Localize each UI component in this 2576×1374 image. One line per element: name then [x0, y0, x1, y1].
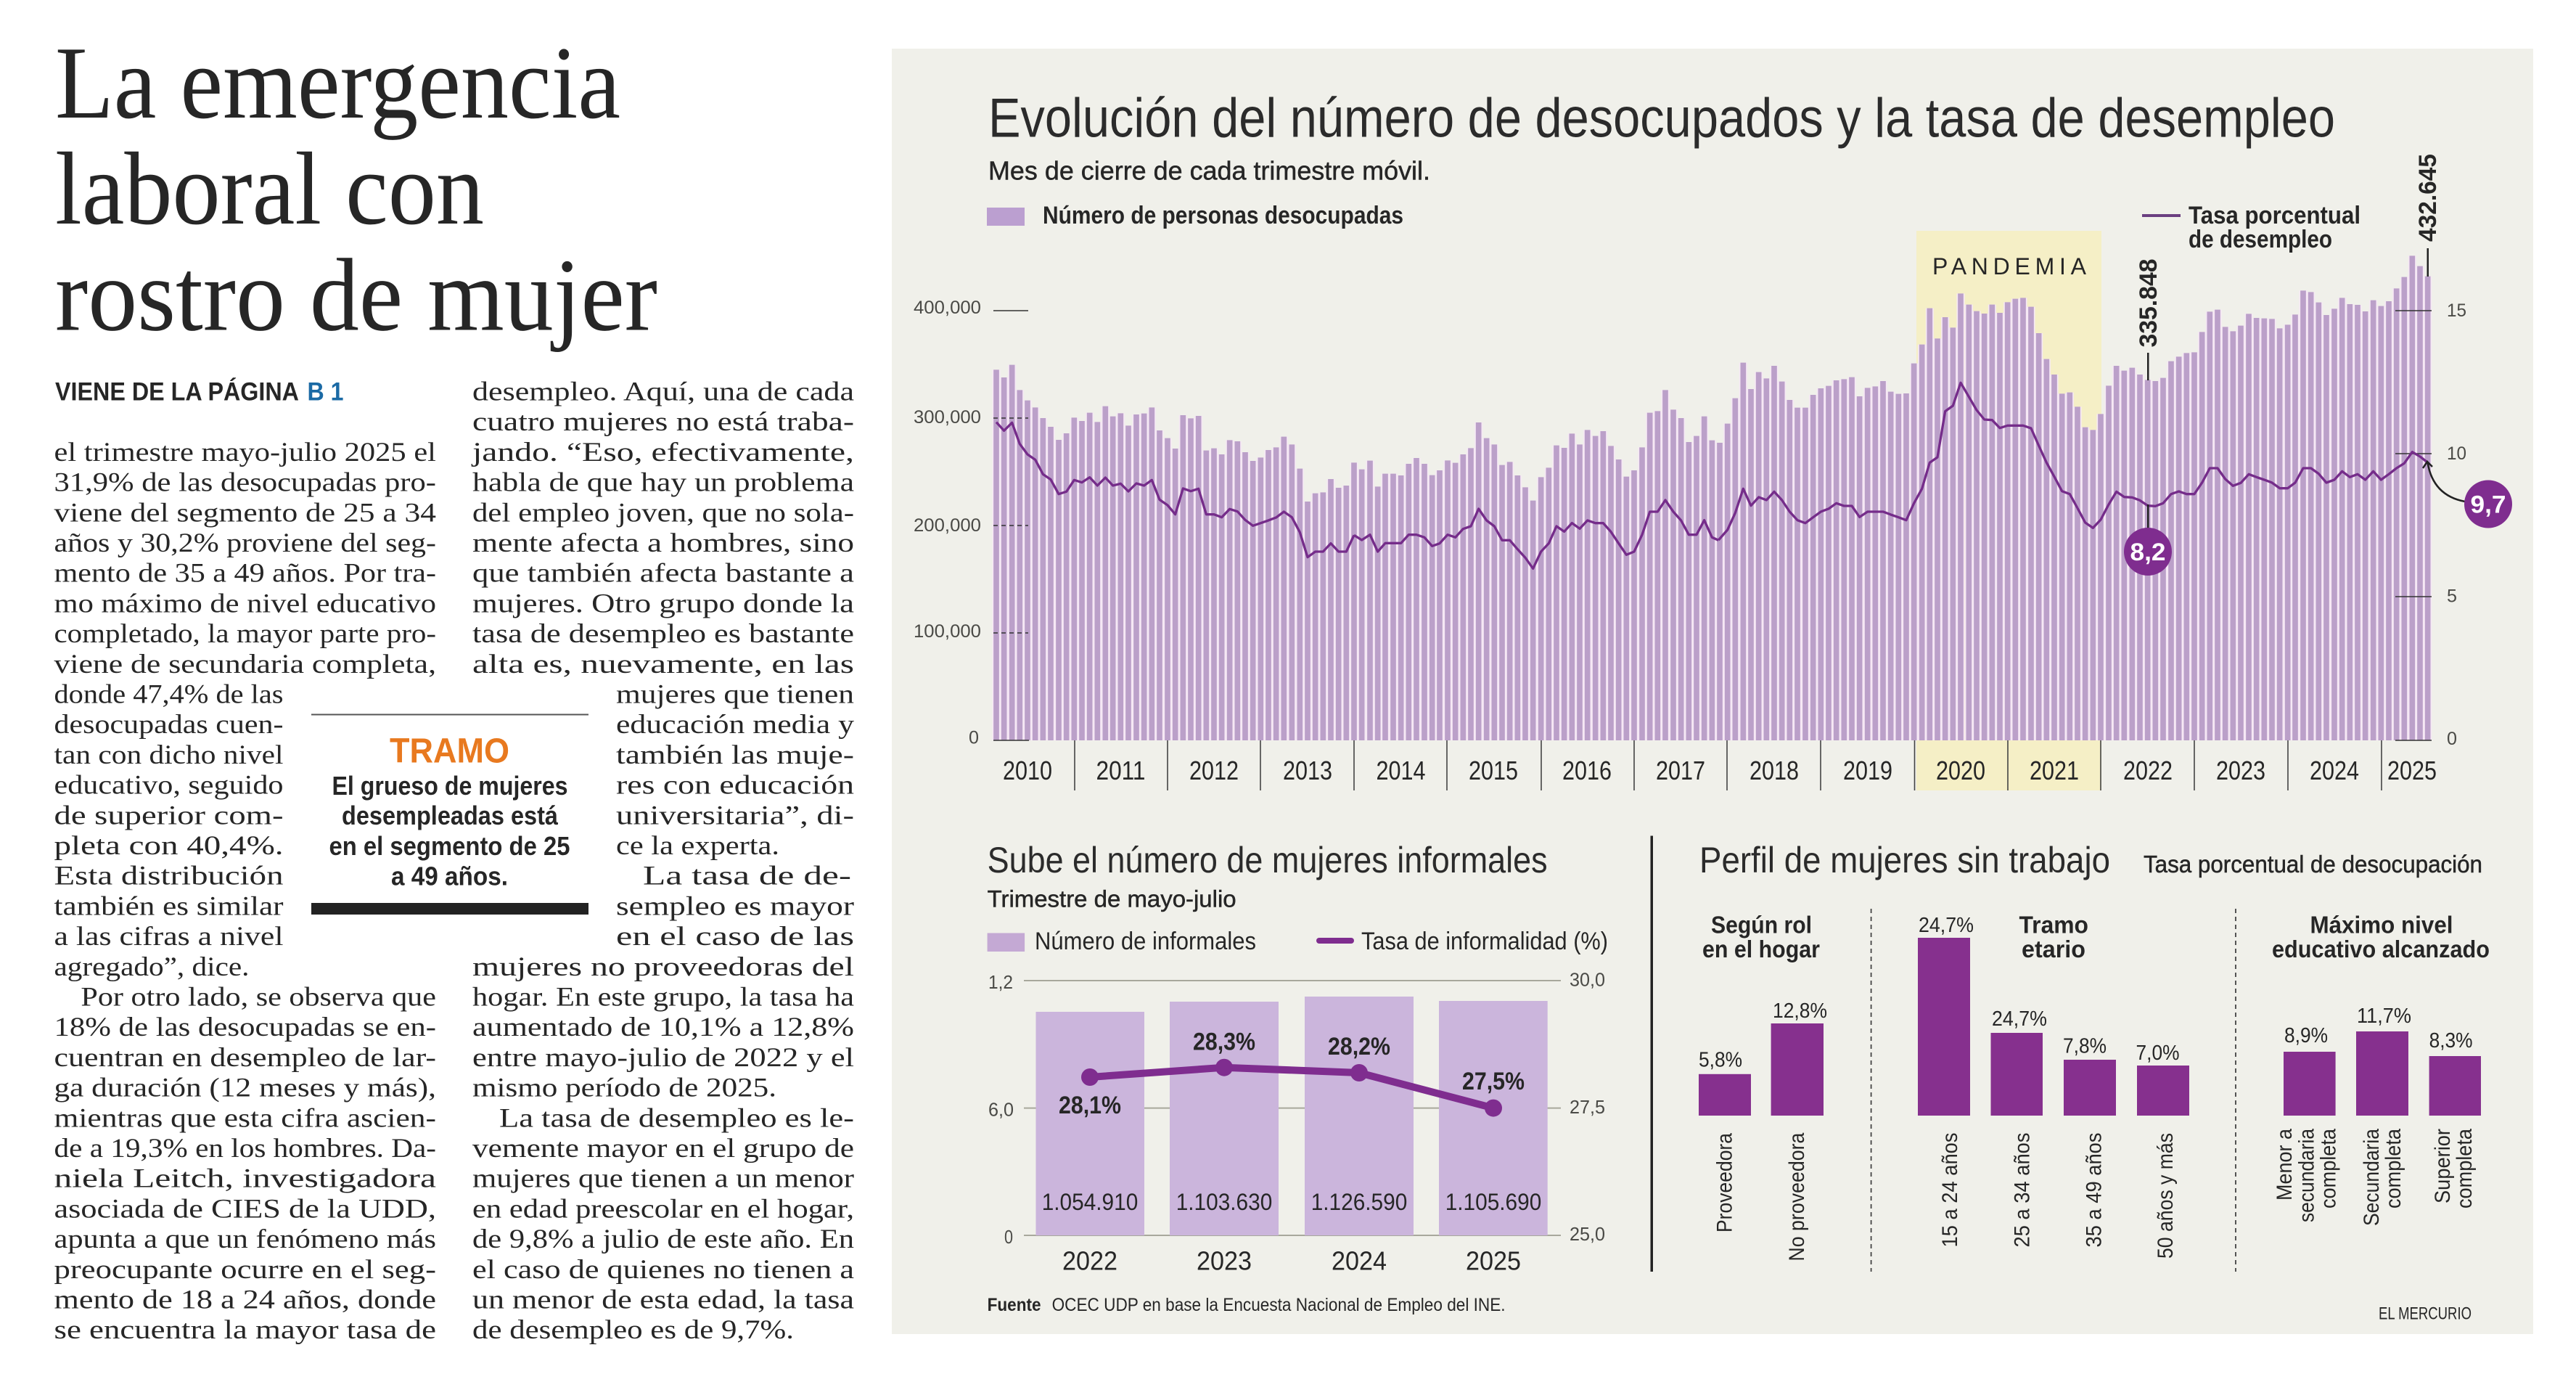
year axis labels: 2013: [1283, 756, 1332, 785]
axis ticks: [993, 311, 2432, 790]
legend: número de informales: Número de informales: [1035, 928, 1256, 955]
article text: second column: habla de que hay un problema: [472, 468, 854, 498]
bar group: tramo etario: 7,0%: [2136, 1042, 2180, 1065]
bar group: máximo nivel educativo alcanzado: 8,3%: [2429, 1029, 2473, 1052]
axis labels: 1,2: [988, 971, 1013, 993]
article text: first column: niela Leitch, investigadora: [54, 1164, 436, 1194]
article text: second column: un menor de esta edad, la tasa: [472, 1285, 854, 1315]
rate labels: 28,3%: [1193, 1029, 1255, 1056]
bar group: máximo nivel educativo alcanzado: completa: [2453, 1129, 2477, 1209]
bar group: máximo nivel educativo alcanzado: Menor a: [2273, 1129, 2297, 1201]
bar group: máximo nivel educativo alcanzado: 8,9%: [2284, 1024, 2328, 1047]
article text: second column: jando. “Eso, efectivamente,: [470, 438, 854, 467]
article text: second column: sempleo es mayor: [616, 891, 854, 921]
article text: second column: en el caso de las: [616, 922, 854, 952]
year axis labels: 2018: [1750, 756, 1799, 785]
right axis labels: 0: [2447, 729, 2457, 749]
legend: tasa porcentual de desempleo: de desempleo: [2189, 226, 2332, 253]
heading: perfil de mujeres sin trabajo: Perfil de mujeres sin trabajo: [1699, 840, 2110, 880]
article text: second column: del empleo joven, que no sola-: [472, 498, 854, 528]
bar group: según rol en el hogar: 5,8%: [1699, 1049, 1742, 1072]
article text: second column: mujeres. Otro grupo donde la: [472, 589, 854, 618]
callout: 432.645: 432.645: [2414, 154, 2442, 242]
article text: first column: de superior com-: [54, 801, 283, 830]
article text: second column: mismo período de 2025.: [472, 1074, 776, 1103]
article text: first column: también es similar: [54, 891, 283, 921]
article text: second column: entre mayo-julio de 2022 y el: [472, 1043, 854, 1073]
pandemic highlight band: PANDEMIA: [1932, 253, 2087, 279]
right axis labels: [2447, 300, 2466, 749]
axis labels: 6,0: [988, 1099, 1014, 1121]
article text: second column: el caso de quienes no tienen a: [472, 1255, 854, 1285]
article text: first column: años y 30,2% proviene del seg-: [54, 528, 436, 558]
article text: first column: mientras que esta cifra ascien-: [54, 1103, 436, 1133]
callout: 335.848: 335.848: [2135, 258, 2162, 347]
article text: first column: tan con dicho nivel: [54, 740, 283, 770]
bar group: máximo nivel educativo alcanzado: completa: [2317, 1129, 2341, 1209]
pull quote: tramo: desempleadas está: [342, 801, 559, 830]
headline: rostro de mujer: [55, 238, 657, 353]
right axis labels: 10: [2447, 443, 2466, 464]
bars: número de informales: [1036, 997, 1548, 1235]
pandemic highlight band: [1916, 231, 2101, 790]
year axis labels: 2021: [2030, 756, 2079, 785]
bar group: tramo etario: 35 a 49 años: [2082, 1132, 2106, 1247]
article text: first column: a las cifras a nivel: [54, 922, 283, 952]
axis labels: [988, 969, 1605, 1248]
subheading: tasa porcentual de desocupación: Tasa porcentual de desocupación: [2144, 851, 2482, 878]
year axis labels: 2023: [2216, 756, 2265, 785]
subheading: trimestre de mayo-julio: Trimestre de mayo-julio: [988, 886, 1236, 912]
bar group: máximo nivel educativo alcanzado: completa: [2382, 1129, 2405, 1209]
bar group: máximo nivel educativo alcanzado: secundaria: [2294, 1129, 2318, 1222]
subheading: mes de cierre: Mes de cierre de cada trimestre móvil.: [988, 155, 1430, 186]
bar group: máximo nivel educativo alcanzado: Secundaria: [2360, 1129, 2384, 1226]
right axis labels: 5: [2447, 586, 2457, 607]
article text: second column: que también afecta bastante a: [472, 559, 854, 589]
article text: first column: asociada de CIES de la UDD,: [54, 1194, 436, 1224]
article text: second column: res con educación: [616, 771, 854, 801]
article text: first column: mo máximo de nivel educativo: [54, 589, 436, 618]
source note: OCEC UDP en base la Encuesta Nacional de Empleo del INE.: [1052, 1295, 1506, 1315]
bar group: tramo etario: 24,7%: [1919, 914, 1974, 937]
article text: first column: agregado”, dice.: [54, 952, 250, 982]
headline: [55, 25, 657, 353]
article text: second column: La tasa de desempleo es le-: [499, 1103, 854, 1133]
pull quote: tramo: TRAMO: [390, 732, 509, 771]
article text: second column: La tasa de de-: [643, 862, 851, 891]
source note: Fuente: [988, 1295, 1041, 1315]
left axis labels: 200,000: [914, 515, 981, 536]
credit: el mercurio: EL MERCURIO: [2379, 1304, 2472, 1324]
year axis labels: 2011: [1096, 756, 1145, 785]
axis labels: 0: [1004, 1226, 1013, 1248]
line: tasa de informalidad: [1081, 1059, 1502, 1117]
bar chart: personas desocupadas: [996, 255, 2428, 740]
left axis labels: 0: [969, 727, 979, 748]
bar group: máximo nivel educativo alcanzado: 11,7%: [2357, 1005, 2411, 1028]
chart: mujeres informales: [988, 969, 1605, 1276]
year axis labels: 2016: [1562, 756, 1612, 785]
article text: first column: preocupante ocurre en el seg-: [54, 1255, 436, 1285]
article text: first column: desocupadas cuen-: [54, 710, 283, 740]
axis labels: 27,5: [1570, 1096, 1605, 1118]
article text: second column: de 9,8% a julio de este año. En: [472, 1224, 854, 1254]
article text: first column: viene del segmento de 25 a 34: [54, 498, 436, 528]
bar value labels: 1.103.630: [1176, 1189, 1272, 1215]
heading: sube el número de mujeres informales: Sube el número de mujeres informales: [988, 840, 1548, 880]
bar group: según rol en el hogar: No proveedora: [1785, 1132, 1809, 1261]
article text: first column: educativo, seguido: [54, 771, 283, 801]
article text: second column: mujeres que tienen a un menor: [472, 1164, 854, 1194]
year axis labels: 2017: [1656, 756, 1705, 785]
article text: first column: el trimestre mayo-julio 2025 el: [54, 438, 436, 467]
pull quote: tramo: El grueso de mujeres: [332, 771, 567, 801]
article text: first column: ga duración (12 meses y más),: [54, 1074, 436, 1103]
bar group: según rol en el hogar: [1699, 912, 1827, 1261]
article text: first column: mento de 35 a 49 años. Por tra-: [54, 559, 436, 589]
bar group: tramo etario: 7,8%: [2063, 1035, 2107, 1058]
bar group: tramo etario: Tramo: [2019, 912, 2088, 938]
left axis labels: 400,000: [914, 298, 981, 318]
article text: second column: [470, 377, 855, 1345]
rate labels: [1059, 1029, 1525, 1119]
bar group: según rol en el hogar: Proveedora: [1713, 1133, 1737, 1232]
continuation line: viene de la página: B 1: [308, 377, 344, 406]
article text: first column: pleta con 40,4%.: [54, 831, 283, 861]
article text: first column: se encuentra la mayor tasa de: [54, 1315, 436, 1345]
year axis labels: 2010: [1003, 756, 1052, 785]
headline: La emergencia: [55, 25, 620, 140]
bar value labels: 1.105.690: [1445, 1189, 1541, 1215]
article text: second column: cuatro mujeres no está traba-: [472, 407, 854, 437]
callout badge with arrow: 9,7: 9,7: [2470, 491, 2506, 518]
left axis labels: 100,000: [914, 621, 981, 642]
article text: first column: Esta distribución: [54, 862, 283, 891]
bar group: máximo nivel educativo alcanzado: Superior: [2431, 1129, 2455, 1203]
article text: second column: vemente mayor en el grupo de: [472, 1134, 854, 1164]
bar value labels: 1.054.910: [1042, 1189, 1138, 1215]
year labels: 2025: [1466, 1246, 1521, 1276]
article text: first column: [54, 438, 436, 1345]
rate labels: 28,2%: [1328, 1033, 1390, 1060]
legend: tasa porcentual de desempleo: [2142, 202, 2360, 253]
bar group: máximo nivel educativo alcanzado: educativo alcanzado: [2272, 936, 2490, 962]
pull quote: tramo: a 49 años.: [391, 862, 508, 891]
continuation line: viene de la página: VIENE DE LA PÁGINA: [55, 377, 299, 406]
article text: second column: alta es, nuevamente, en las: [472, 650, 854, 679]
year axis labels: [1003, 756, 2437, 785]
article text: second column: educación media y: [616, 710, 855, 740]
legend: número de personas desocupadas: Número de personas desocupadas: [1043, 202, 1403, 229]
heading: evolución: Evolución del número de desocupados y la tasa de desempleo: [988, 88, 2335, 150]
year axis labels: 2020: [1936, 756, 1985, 785]
article text: second column: de desempleo es de 9,7%.: [472, 1315, 794, 1345]
bar group: tramo etario: 15 a 24 años: [1938, 1132, 1962, 1247]
year labels: 2023: [1197, 1246, 1252, 1276]
bar group: tramo etario: etario: [2022, 936, 2085, 962]
callout badge with arrow: 9,7: [2423, 462, 2512, 528]
bar group: según rol en el hogar: Según rol: [1711, 912, 1812, 938]
bar group: máximo nivel educativo alcanzado: Máximo nivel: [2310, 912, 2453, 938]
headline: laboral con: [55, 131, 484, 246]
article text: second column: en edad preescolar en el hogar,: [472, 1194, 854, 1224]
article text: first column: 18% de las desocupadas se en-: [54, 1013, 436, 1042]
year axis labels: 2015: [1469, 756, 1518, 785]
year labels: 2024: [1332, 1246, 1387, 1276]
article text: second column: universitaria”, di-: [616, 801, 854, 830]
bar value labels: 1.126.590: [1311, 1189, 1407, 1215]
legend: tasa porcentual de desempleo: Tasa porcentual: [2189, 202, 2360, 229]
rate labels: 28,1%: [1059, 1092, 1121, 1119]
panel: infographic: [892, 49, 2533, 1334]
year axis labels: 2025: [2387, 756, 2437, 785]
pull quote: tramo: [311, 714, 588, 915]
bar group: tramo etario: 24,7%: [1992, 1007, 2047, 1031]
year labels: 2022: [1062, 1246, 1117, 1276]
bar value labels: [1042, 1189, 1541, 1215]
article text: second column: hogar. En este grupo, la tasa ha: [472, 983, 854, 1012]
bar group: tramo etario: 50 años y más: [2154, 1133, 2178, 1259]
article text: second column: también las muje-: [616, 740, 854, 770]
line chart: tasa de desempleo: [996, 383, 2428, 568]
left axis labels: [914, 298, 981, 748]
article text: first column: mento de 18 a 24 años, donde: [54, 1285, 436, 1315]
article text: first column: 31,9% de las desocupadas pro-: [54, 468, 436, 498]
article text: second column: tasa de desempleo es bastante: [472, 619, 854, 649]
left axis labels: 300,000: [914, 407, 981, 428]
rate labels: 27,5%: [1462, 1068, 1525, 1095]
callout badge: 8,2: [2124, 504, 2172, 576]
bar group: tramo etario: 25 a 34 años: [2010, 1132, 2035, 1247]
callout badge: 8,2: 8,2: [2130, 539, 2165, 566]
year axis labels: 2012: [1189, 756, 1239, 785]
bar group: según rol en el hogar: en el hogar: [1702, 936, 1820, 962]
bar group: máximo nivel educativo alcanzado: [2272, 912, 2490, 1226]
article text: second column: mujeres no proveedoras del: [472, 952, 854, 982]
article text: first column: donde 47,4% de las: [54, 679, 283, 710]
article text: first column: cuentran en desempleo de lar-: [54, 1043, 436, 1073]
right axis labels: 15: [2447, 300, 2466, 321]
article text: second column: mente afecta a hombres, sino: [472, 528, 854, 558]
article text: second column: desempleo. Aquí, una de cada: [472, 377, 854, 406]
article text: first column: viene de secundaria completa,: [54, 650, 436, 679]
legend: tasa de informalidad: Tasa de informalidad (%): [1361, 928, 1608, 955]
article text: first column: Por otro lado, se observa que: [81, 983, 436, 1012]
article text: first column: completado, la mayor parte pro-: [54, 619, 436, 649]
article text: second column: aumentado de 10,1% a 12,8%: [472, 1013, 854, 1042]
year axis labels: 2019: [1843, 756, 1892, 785]
axis labels: 30,0: [1570, 969, 1605, 991]
year axis labels: 2022: [2123, 756, 2173, 785]
article text: first column: de a 19,3% en los hombres. Da-: [54, 1134, 436, 1164]
year axis labels: 2014: [1376, 756, 1425, 785]
article text: second column: mujeres que tienen: [616, 679, 854, 710]
bar group: según rol en el hogar: 12,8%: [1773, 999, 1827, 1023]
article text: first column: apunta a que un fenómeno más: [54, 1224, 436, 1254]
bar group: tramo etario: [1918, 912, 2189, 1259]
axis labels: 25,0: [1570, 1223, 1605, 1245]
year labels: [1062, 1246, 1521, 1276]
article text: second column: ce la experta.: [616, 831, 779, 861]
year axis labels: 2024: [2310, 756, 2359, 785]
pull quote: tramo: en el segmento de 25: [329, 831, 570, 861]
